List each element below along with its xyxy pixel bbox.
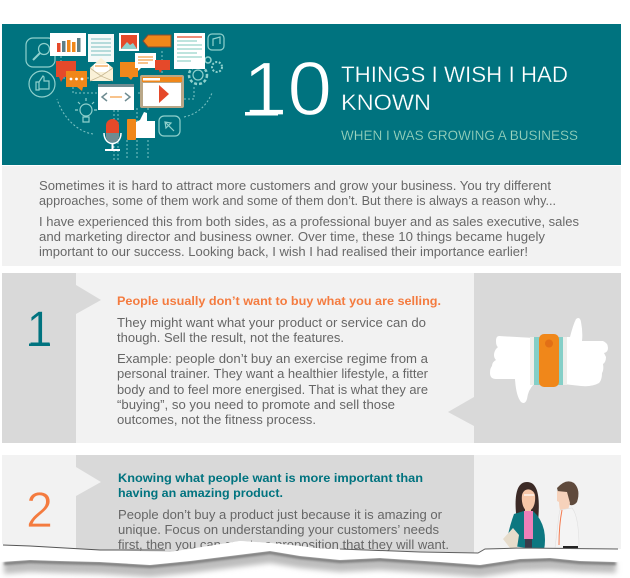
body text 1: They might want what your product or service can do — [117, 316, 426, 330]
icon: code window — [98, 84, 134, 110]
icon cluster: marketing illustration — [26, 33, 224, 160]
woman — [503, 482, 545, 550]
panel: introduction — [2, 166, 621, 266]
icon: picture — [119, 33, 139, 51]
icon: thumbs up and thumbs down hands — [490, 318, 608, 403]
panel: introduction: important to our success. Looking back, I wish I had realised their importance earlier! — [39, 245, 528, 259]
body text 1: though. Sell the result, not the features. — [117, 331, 344, 345]
body text 1: body and to feel more energised. That is what they are — [117, 383, 428, 397]
heading 2: Knowing what people want is more important than — [118, 471, 423, 485]
panel: introduction: and marketing director and business owner. Over time, these 10 things became hugely — [39, 230, 546, 244]
number 1: 1 — [27, 301, 52, 357]
panel: header banner — [2, 24, 621, 165]
body text 1: Example: people don’t buy an exercise regime from a — [117, 352, 428, 366]
torn paper edge — [0, 541, 630, 578]
body text 2: People don’t buy a product just because it is amazing or — [118, 508, 442, 522]
icon: microphone — [104, 119, 121, 150]
icon: long document — [174, 33, 205, 69]
body text 1: personal trainer. They want a healthier lifestyle, a fitter — [117, 367, 428, 381]
title number: 10 — [243, 47, 332, 132]
title text: THINGS I WISH I HAD — [341, 62, 568, 87]
man — [555, 481, 579, 550]
panel: introduction: Sometimes it is hard to attract more customers and grow your business. You try different — [39, 179, 552, 193]
heading 2 — [118, 471, 423, 500]
subtitle: WHEN I WAS GROWING A BUSINESS — [341, 127, 578, 143]
heading 1: People usually don’t want to buy what you are selling. — [117, 294, 441, 308]
icon: envelope — [90, 58, 113, 81]
icon: price tag — [143, 35, 171, 47]
title text: KNOWN — [341, 90, 431, 115]
icon: video player — [140, 75, 184, 108]
panel: introduction: I have experienced this from both sides, as a professional buyer and as sales executive, sales — [39, 215, 579, 229]
panel: introduction: approaches, some of them work and some of them don’t. But there is always a reason why... — [39, 194, 556, 208]
body text 1: “buying”, so you need to promote and sell those — [117, 398, 395, 412]
icon: document — [88, 34, 114, 62]
illustration: businesswoman and businessman — [503, 481, 579, 550]
icon: speech bubbles — [56, 53, 170, 91]
icon: thumbs up — [127, 112, 155, 140]
body text 2: first, then you can create a proposition that they will want. — [118, 538, 449, 552]
number 2: 2 — [26, 482, 53, 538]
body text 1 — [117, 316, 428, 427]
title text — [341, 62, 568, 115]
heading 2: having an amazing product. — [118, 486, 283, 500]
panel: tip 1 — [2, 273, 621, 443]
body text 1: outcomes, not the fitness process. — [117, 413, 316, 427]
body text 2 — [118, 508, 449, 552]
panel: tip 2 — [2, 455, 621, 555]
body text 2: unique. Focus on understanding your customers’ needs — [118, 523, 439, 537]
icon: bar chart card — [50, 33, 86, 56]
